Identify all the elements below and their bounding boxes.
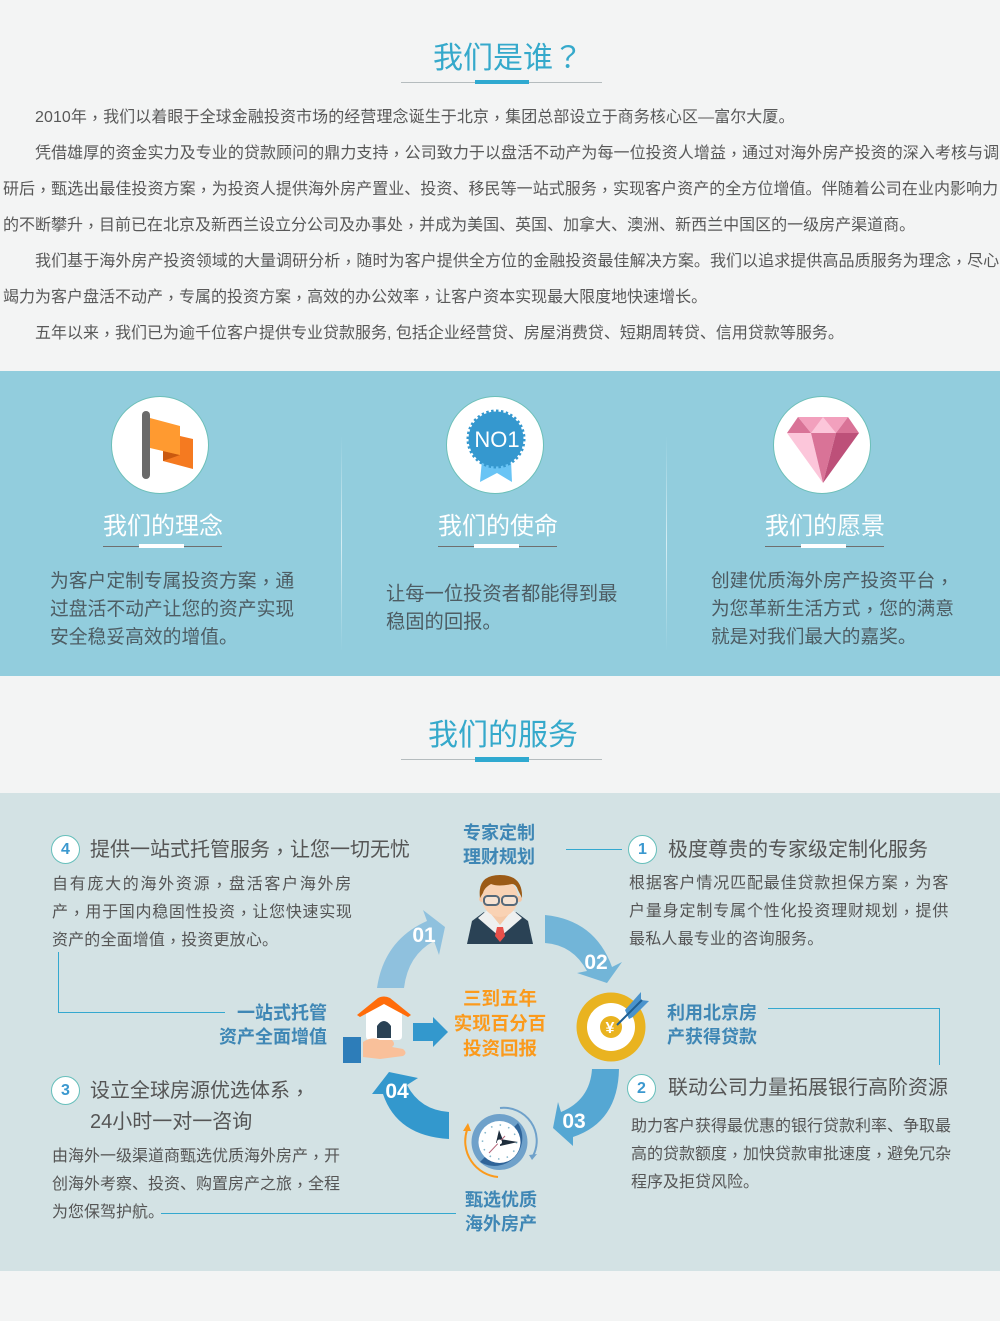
label: beijing property loan: 利用北京房 <box>667 1003 757 1023</box>
arrow 04: 04 <box>385 1080 409 1103</box>
philosophy text <box>50 568 294 646</box>
mission text <box>386 583 617 633</box>
company intro text block: 凭借雄厚的资金实力及专业的贷款顾问的鼎力支持，公司致力于以盘活不动产为每一位投资人增益，通过对海外房产投资的深入考核与调 <box>35 141 999 165</box>
heading: our services: 我们的服务 <box>428 719 578 752</box>
label: select property <box>465 1190 537 1234</box>
arrow 02: 02 <box>584 951 608 974</box>
arrow: center <box>413 1017 448 1047</box>
company intro text block <box>3 105 999 345</box>
arrow 01: 01 <box>412 924 436 947</box>
label: one-stop management: 一站式托管 <box>237 1003 327 1023</box>
company intro text block: 我们基于海外房产投资领域的大量调研分析，随时为客户提供全方位的金融投资最佳解决方案。我们以追求提供高品质服务为理念，尽心 <box>35 249 999 273</box>
philosophy underline <box>103 544 222 548</box>
label: select property: 海外房产 <box>465 1214 537 1234</box>
label: center return: 实现百分百 <box>454 1013 546 1034</box>
company intro text block: 2010年，我们以着眼于全球金融投资市场的经营理念诞生于北京，集团总部设立于商务核心区—富尔大厦。 <box>35 105 795 129</box>
panel heading: vision: 我们的愿景 <box>765 513 885 540</box>
services heading underline <box>401 757 602 762</box>
philosophy text: 安全稳妥高效的增值。 <box>50 626 238 646</box>
service 3 title: 24小时一对一咨询 <box>90 1111 252 1133</box>
service 1 badge: 1 <box>638 841 647 858</box>
service 1 badge <box>628 835 657 864</box>
philosophy text: 过盘活不动产让您的资产实现 <box>50 598 294 618</box>
arrow 03 <box>553 1069 619 1146</box>
icon: house in hand <box>343 996 411 1063</box>
icon: NO1 badge <box>446 396 544 494</box>
label: one-stop management <box>219 1003 327 1047</box>
mission underline <box>438 544 557 548</box>
icon: clock <box>463 1108 537 1177</box>
vision text: 就是对我们最大的嘉奖。 <box>711 626 917 646</box>
service 2 text: 高的贷款额度，加快贷款审批速度，避免冗杂 <box>631 1142 951 1166</box>
service 1 text <box>629 871 949 948</box>
panel: values band <box>0 371 1000 676</box>
service 4 text: 自有庞大的海外资源，盘活客户海外房 <box>52 872 353 896</box>
divider right <box>666 436 667 651</box>
service 2 badge: 2 <box>637 1080 646 1097</box>
vision text: 为您革新生活方式，您的满意 <box>711 596 954 623</box>
vision underline <box>765 544 884 548</box>
label: one-stop management: 资产全面增值 <box>219 1027 327 1047</box>
service 4 text: 资产的全面增值，投资更放心。 <box>52 928 278 952</box>
connector lines <box>58 849 940 1214</box>
service 3 badge <box>51 1076 80 1105</box>
label: expert planning: 理财规划 <box>463 847 535 867</box>
arrow 02 <box>545 915 622 983</box>
label: expert planning: 专家定制 <box>463 823 535 843</box>
service 2 title: 联动公司力量拓展银行高阶资源 <box>668 1077 948 1099</box>
mission text: 稳固的回报。 <box>386 612 502 633</box>
icon: target <box>576 992 649 1062</box>
label: select property: 甄选优质 <box>465 1190 537 1210</box>
label: center return <box>454 988 546 1059</box>
heading underline <box>401 80 602 84</box>
vision text <box>711 568 954 646</box>
service 2 text <box>631 1117 951 1191</box>
service 2 text: 程序及拒贷风险。 <box>631 1174 759 1191</box>
arrow 01 <box>377 910 445 988</box>
service 1 text: 户量身定制专属个性化投资理财规划，提供 <box>629 899 949 923</box>
service 3 badge: 3 <box>61 1082 70 1099</box>
vision text: 创建优质海外房产投资平台， <box>711 568 954 595</box>
service 4 title: 提供一站式托管服务，让您一切无忧 <box>90 836 410 865</box>
label: expert planning <box>463 823 535 867</box>
service 4 badge: 4 <box>61 841 70 858</box>
service 1 text: 最私人最专业的咨询服务。 <box>629 931 823 948</box>
icon: target: ¥ <box>606 1020 615 1037</box>
company intro text block: 研后，甄选出最佳投资方案，为投资人提供海外房产置业、投资、移民等一站式服务，实现客户资产的全方位增值。伴随着公司在业内影响力 <box>3 177 998 201</box>
philosophy text: 为客户定制专属投资方案，通 <box>50 568 294 595</box>
service 4 text <box>52 872 353 952</box>
heading: who we are: 我们是谁？ <box>433 33 583 77</box>
company intro text block: 五年以来，我们已为逾千位客户提供专业贷款服务, 包括企业经营贷、房屋消费贷、短期周转贷、信用贷款等服务。 <box>35 321 844 345</box>
panel heading: mission: 我们的使命 <box>438 513 558 540</box>
service 3 title <box>90 1077 310 1133</box>
service 3 title: 设立全球房源优选体系， <box>90 1077 310 1106</box>
company intro text block: 竭力为客户盘活不动产，专属的投资方案，高效的办公效率，让客户资本实现最大限度地快速增长。 <box>3 285 707 309</box>
service 3 text: 创海外考察、投资、购置房产之旅，全程 <box>52 1172 340 1196</box>
service 3 text: 为您保驾护航。 <box>52 1204 164 1221</box>
label: center return: 三到五年 <box>463 988 537 1009</box>
service 2 text: 助力客户获得最优惠的银行贷款利率、争取最 <box>631 1118 951 1135</box>
service 3 text <box>52 1144 340 1221</box>
service 1 title: 极度尊贵的专家级定制化服务 <box>668 839 928 861</box>
panel: services <box>0 793 1000 1271</box>
service 4 text: 产，用于国内稳固性投资，让您快速实现 <box>52 900 353 924</box>
panel heading: philosophy: 我们的理念 <box>103 513 223 540</box>
company intro text block: 的不断攀升，目前已在北京及新西兰设立分公司及办事处，并成为美国、英国、加拿大、澳洲、新西兰中国区的一级房产渠道商。 <box>3 213 915 237</box>
label: beijing property loan: 产获得贷款 <box>667 1027 757 1047</box>
mission text: 让每一位投资者都能得到最 <box>386 584 617 605</box>
divider left <box>341 436 342 651</box>
icon: NO1 badge: NO1 <box>474 427 520 452</box>
icon: flag <box>111 396 209 494</box>
icon: diamond <box>773 396 871 494</box>
service 4 badge <box>51 835 80 864</box>
service 2 badge <box>627 1074 656 1103</box>
service 1 text: 根据客户情况匹配最佳贷款担保方案，为客 <box>629 871 949 895</box>
label: center return: 投资回报 <box>463 1038 537 1059</box>
arrow 03: 03 <box>562 1110 586 1133</box>
icon: advisor <box>467 875 533 944</box>
label: beijing property loan <box>667 1003 757 1047</box>
service 3 text: 由海外一级渠道商甄选优质海外房产，开 <box>52 1144 340 1168</box>
arrow 04 <box>372 1072 449 1139</box>
